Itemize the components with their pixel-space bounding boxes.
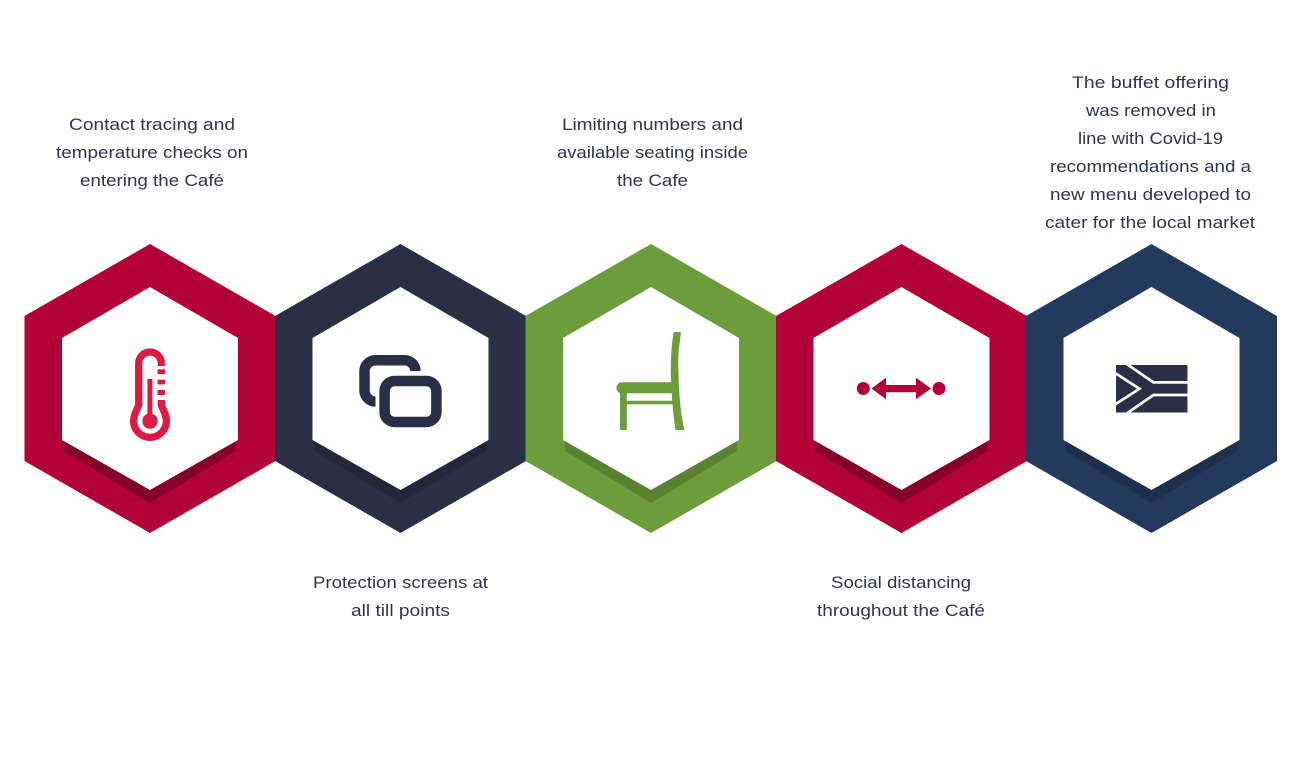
- panel: hexagon 3 chair: [526, 244, 776, 533]
- panel: hexagon 4 distancing: [776, 244, 1027, 533]
- text: buffet offering: cater for the local market: [1045, 213, 1255, 232]
- panel: hexagon 2 screens: [275, 244, 526, 533]
- icon: chair: [616, 332, 684, 430]
- text: contact tracing: entering the Café: [80, 171, 224, 190]
- text: protection screens: Protection screens at: [313, 573, 488, 592]
- text: social distancing: throughout the Café: [817, 601, 985, 620]
- text: limiting numbers: available seating inside: [557, 143, 748, 162]
- text: limiting numbers: Limiting numbers and: [562, 115, 743, 134]
- text: buffet offering: The buffet offering: [1072, 73, 1229, 92]
- text: contact tracing: temperature checks on: [56, 143, 248, 162]
- text: social distancing: Social distancing: [831, 573, 971, 592]
- text: contact tracing: [56, 115, 248, 190]
- text: buffet offering: line with Covid-19: [1078, 129, 1223, 148]
- text: protection screens: all till points: [351, 601, 450, 620]
- icon: thermometer: [134, 352, 166, 437]
- icon: protection screens: [364, 360, 436, 422]
- text: buffet offering: [1045, 73, 1255, 232]
- icon: social distancing arrow: [857, 378, 946, 399]
- text: contact tracing: Contact tracing and: [69, 115, 235, 134]
- panel: hexagon 5 flag: [1026, 244, 1277, 533]
- text: social distancing: [817, 573, 985, 620]
- text: limiting numbers: [557, 115, 748, 190]
- text: protection screens: [313, 573, 488, 620]
- icon: South African flag: [1115, 364, 1188, 414]
- text: buffet offering: was removed in: [1085, 101, 1216, 120]
- text: limiting numbers: the Cafe: [617, 171, 688, 190]
- panel: hexagon 1 thermometer: [24, 244, 276, 533]
- text: buffet offering: recommendations and a: [1050, 157, 1252, 176]
- text: buffet offering: new menu developed to: [1050, 185, 1251, 204]
